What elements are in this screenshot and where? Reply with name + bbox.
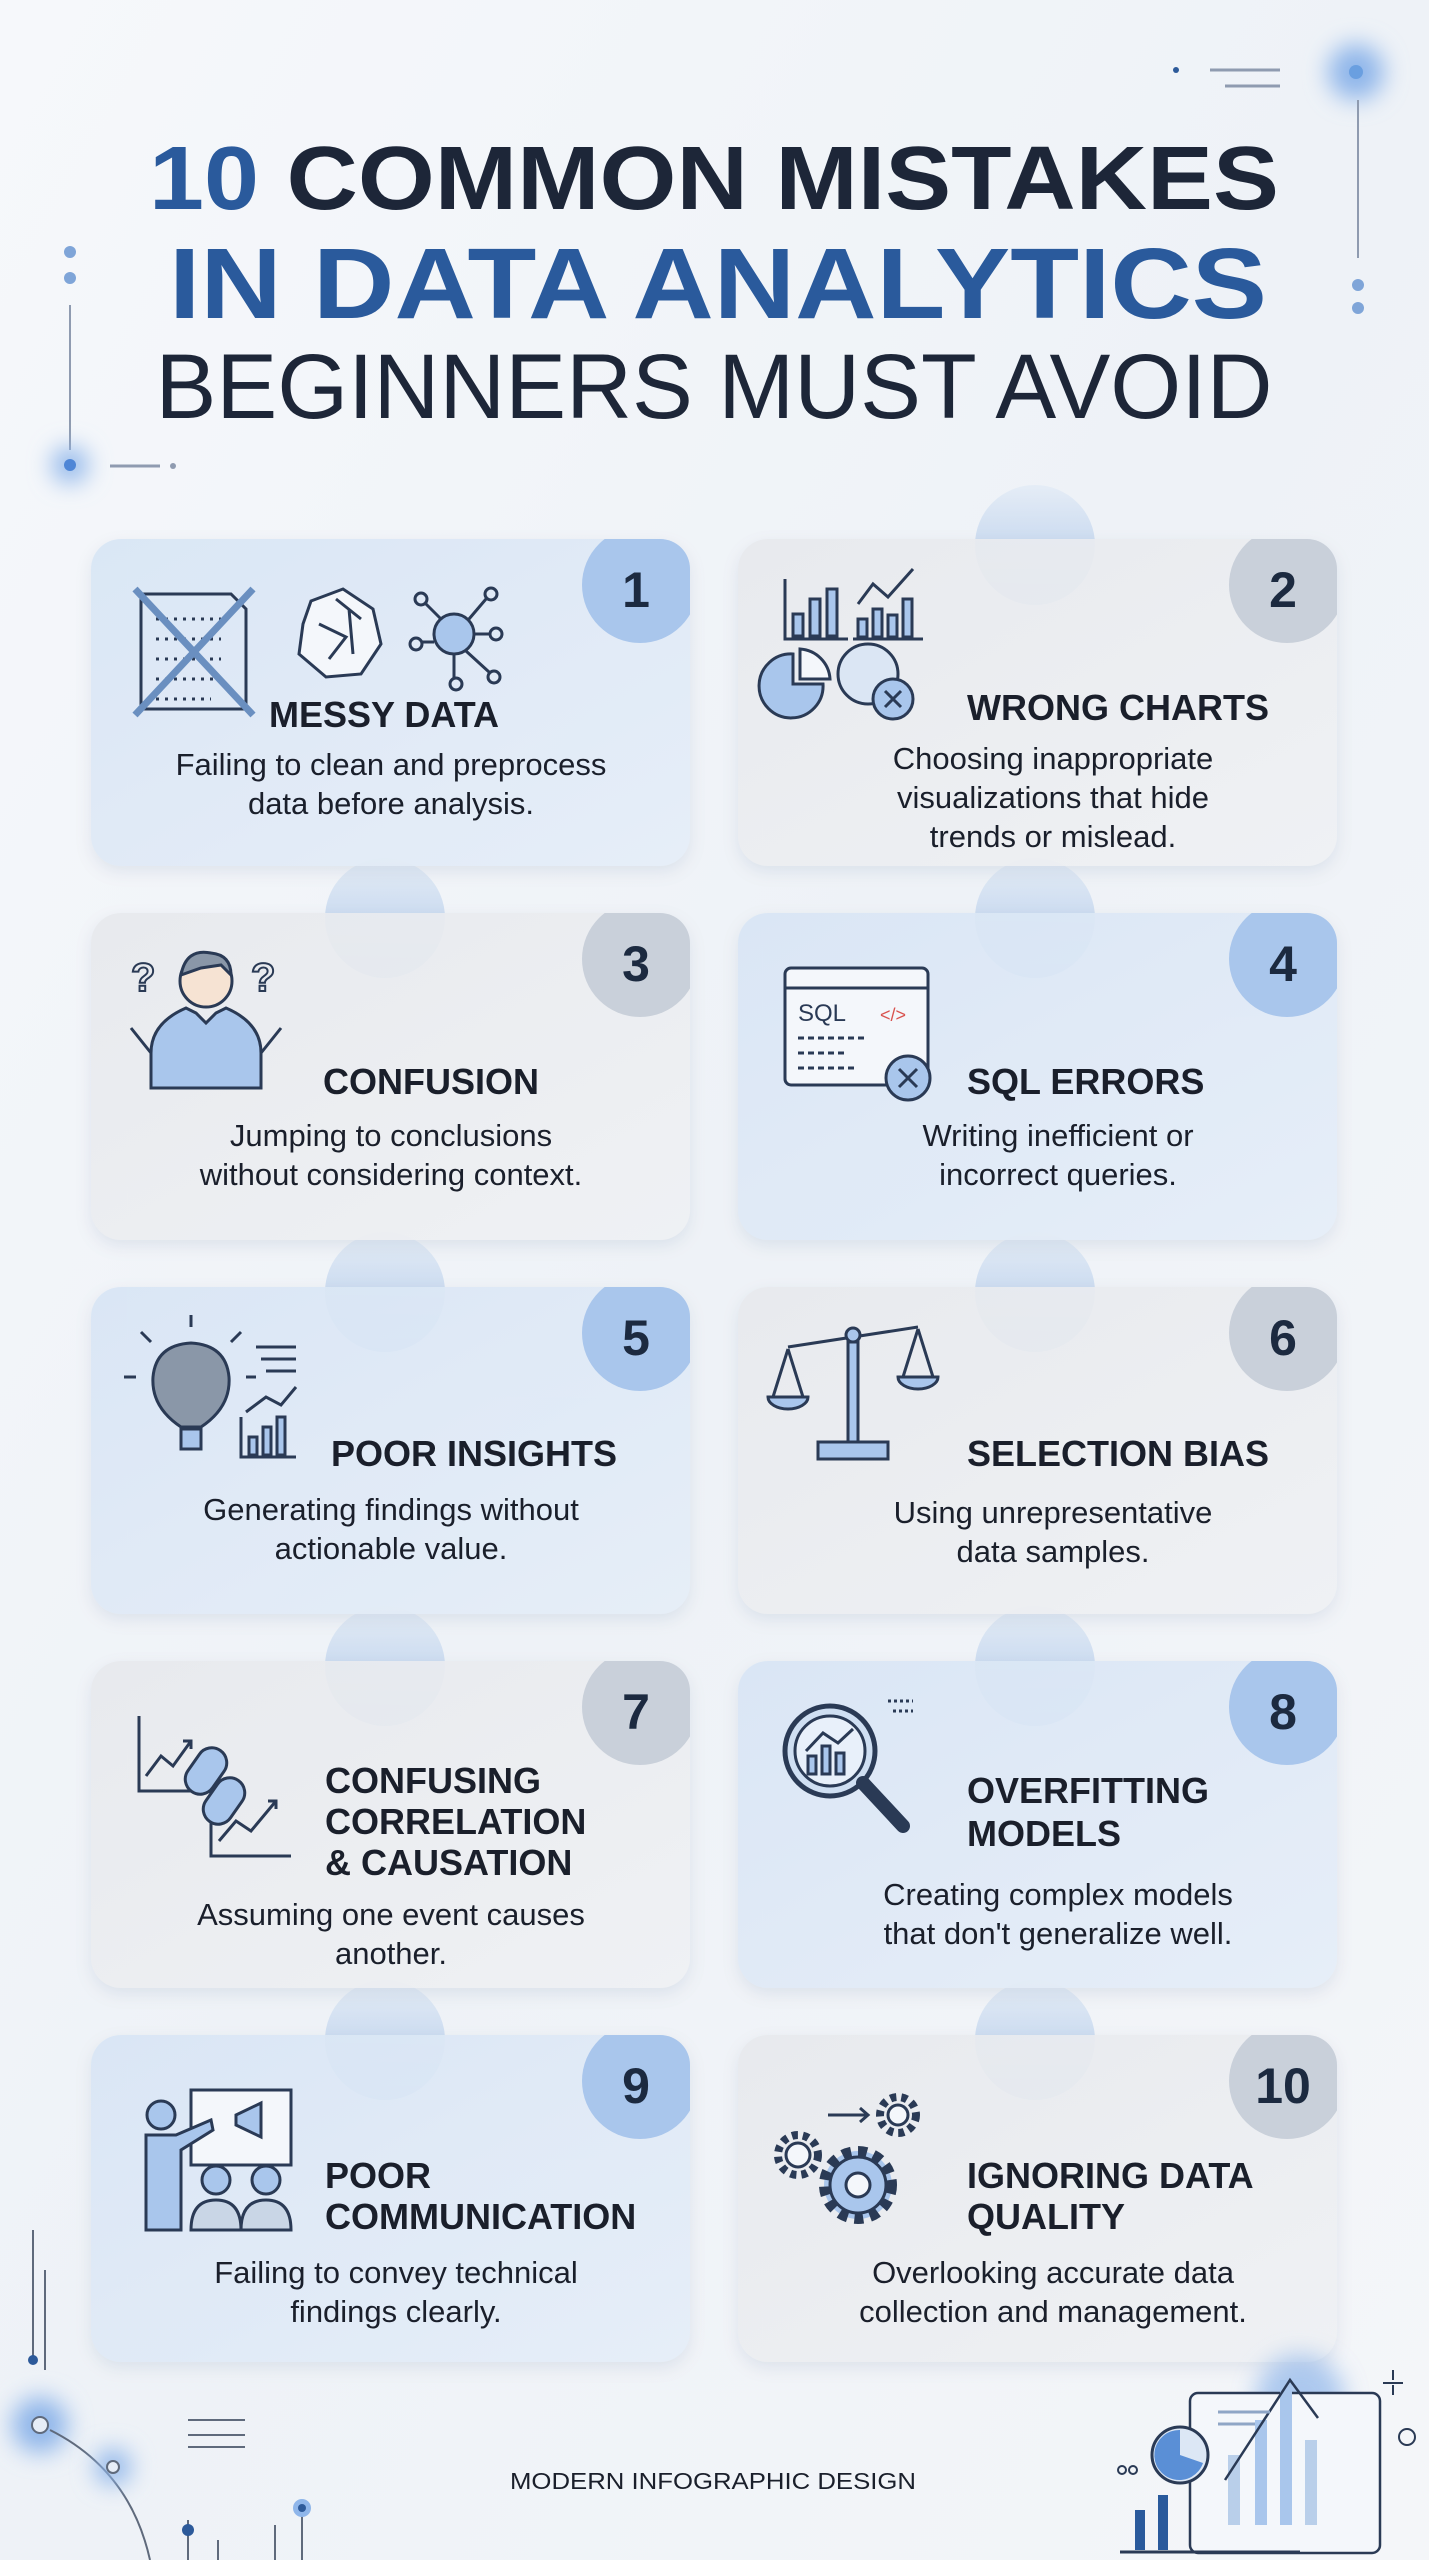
heading: COMMUNICATION bbox=[325, 2196, 636, 2237]
card 7: correlation causation bbox=[91, 1649, 698, 1988]
card 2: wrong charts bbox=[738, 527, 1345, 866]
badge 1: 1 bbox=[622, 562, 650, 618]
description: without considering context. bbox=[199, 1157, 582, 1192]
badge 2: 2 bbox=[1269, 562, 1297, 618]
icon: sql window bbox=[785, 968, 930, 1100]
description: Failing to clean and preprocess bbox=[176, 747, 606, 782]
title: IN DATA ANALYTICS bbox=[169, 228, 1267, 340]
heading: CONFUSION bbox=[323, 1061, 539, 1102]
icon: confused person: ? bbox=[251, 956, 275, 1000]
badge 8: 8 bbox=[1269, 1684, 1297, 1740]
description: that don't generalize well. bbox=[884, 1916, 1232, 1951]
description: Writing inefficient or bbox=[922, 1118, 1194, 1153]
icon: scale bbox=[768, 1327, 938, 1459]
heading: SQL ERRORS bbox=[967, 1061, 1204, 1102]
tabs behind cards bbox=[325, 485, 1095, 2100]
icon: confused person bbox=[131, 952, 281, 1088]
description: Creating complex models bbox=[883, 1877, 1233, 1912]
decoration: top right glow bbox=[1173, 44, 1384, 314]
icon: sql window: </> bbox=[880, 1005, 906, 1025]
card 3: confusion bbox=[91, 901, 698, 1240]
icon: presenter bbox=[146, 2090, 291, 2230]
card 4: sql errors bbox=[738, 901, 1345, 1240]
description: Assuming one event causes bbox=[197, 1897, 585, 1932]
description: data samples. bbox=[956, 1534, 1150, 1569]
icon: bottom right dashboard bbox=[1118, 2355, 1415, 2553]
heading: MESSY DATA bbox=[269, 694, 499, 735]
description: actionable value. bbox=[275, 1531, 507, 1566]
badge 9: 9 bbox=[622, 2058, 650, 2114]
icon: messy data bbox=[135, 588, 502, 715]
icon: magnifier bbox=[785, 1701, 913, 1826]
heading: WRONG CHARTS bbox=[967, 687, 1269, 728]
heading: CORRELATION bbox=[325, 1801, 586, 1842]
title: 10 COMMON MISTAKES bbox=[149, 129, 1279, 229]
icon: bulb with chart bbox=[124, 1315, 296, 1457]
badge 4: 4 bbox=[1269, 936, 1297, 992]
description: findings clearly. bbox=[290, 2294, 502, 2329]
heading: OVERFITTING bbox=[967, 1770, 1209, 1811]
heading: MODELS bbox=[967, 1813, 1121, 1854]
heading: CONFUSING bbox=[325, 1760, 541, 1801]
title bbox=[149, 129, 1279, 438]
badge 3: 3 bbox=[622, 936, 650, 992]
description: Overlooking accurate data bbox=[872, 2255, 1235, 2290]
card 6: selection bias bbox=[738, 1275, 1345, 1614]
badge 7: 7 bbox=[622, 1684, 650, 1740]
icon: sql window: SQL bbox=[798, 1000, 846, 1027]
description: trends or mislead. bbox=[930, 819, 1176, 854]
badge 10: 10 bbox=[1255, 2058, 1311, 2114]
card 1: messy data bbox=[91, 527, 698, 866]
description: Choosing inappropriate bbox=[893, 741, 1213, 776]
icon: chain and trends bbox=[139, 1716, 291, 1856]
description: incorrect queries. bbox=[939, 1157, 1177, 1192]
description: visualizations that hide bbox=[897, 780, 1209, 815]
description: data before analysis. bbox=[248, 786, 534, 821]
heading: SELECTION BIAS bbox=[967, 1433, 1269, 1474]
decoration: bottom left bbox=[12, 2230, 311, 2560]
heading: & CAUSATION bbox=[325, 1842, 572, 1883]
card 9: poor communication bbox=[91, 2023, 698, 2362]
card 10: data quality bbox=[738, 2023, 1345, 2362]
description: Using unrepresentative bbox=[894, 1495, 1212, 1530]
icon: gears bbox=[778, 2097, 916, 2219]
heading: IGNORING DATA bbox=[967, 2155, 1254, 2196]
heading: POOR INSIGHTS bbox=[331, 1433, 617, 1474]
heading: POOR bbox=[325, 2155, 431, 2196]
description: Generating findings without bbox=[203, 1492, 579, 1527]
badge 6: 6 bbox=[1269, 1310, 1297, 1366]
description: Failing to convey technical bbox=[214, 2255, 578, 2290]
card 5: poor insights bbox=[91, 1275, 698, 1614]
title: BEGINNERS MUST AVOID bbox=[156, 336, 1272, 438]
footer text: MODERN INFOGRAPHIC DESIGN bbox=[510, 2468, 916, 2494]
description: Jumping to conclusions bbox=[230, 1118, 552, 1153]
description: another. bbox=[335, 1936, 447, 1971]
badge 5: 5 bbox=[622, 1310, 650, 1366]
decoration: top left bbox=[52, 246, 176, 483]
icon: charts bbox=[759, 569, 923, 719]
description: collection and management. bbox=[859, 2294, 1247, 2329]
icon: confused person: ? bbox=[131, 956, 155, 1000]
card 8: overfitting bbox=[738, 1649, 1345, 1988]
heading: QUALITY bbox=[967, 2196, 1125, 2237]
